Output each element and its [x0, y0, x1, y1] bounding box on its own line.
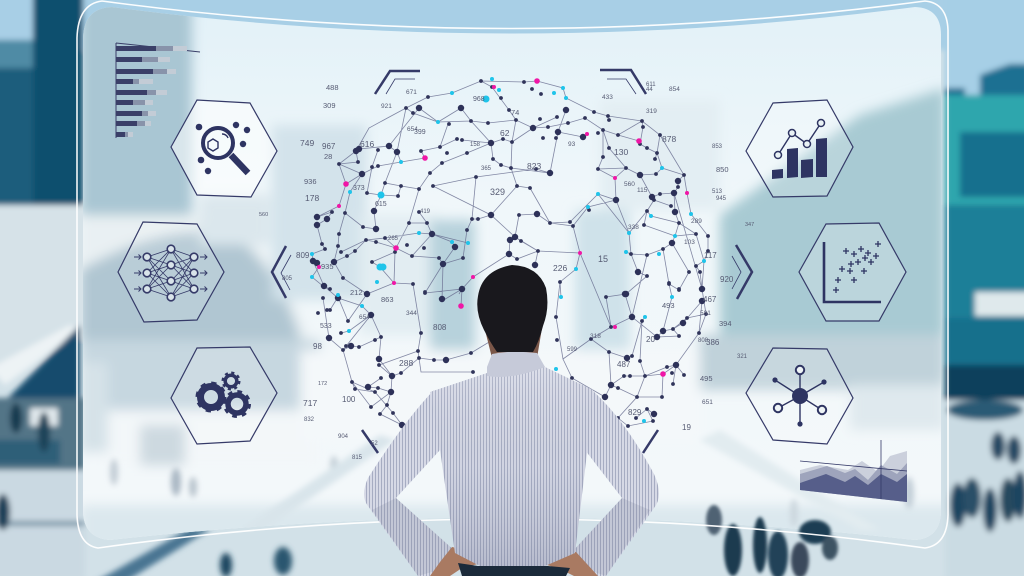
- floating data numbers: 433: [602, 94, 613, 101]
- hair: [477, 265, 547, 352]
- floating data numbers: 671: [406, 89, 417, 96]
- floating data numbers: 936: [304, 177, 317, 186]
- floating data numbers: 318: [590, 333, 601, 340]
- large cyan nodes: [380, 99, 486, 267]
- floating data numbers: 488: [326, 83, 339, 92]
- floating data numbers: 616: [360, 139, 374, 149]
- floating data numbers: 832: [304, 417, 315, 423]
- floating data numbers: 158: [470, 142, 481, 148]
- floating data numbers: 20: [646, 335, 655, 344]
- floating data numbers: 967: [322, 142, 336, 151]
- floating data numbers: 560: [624, 181, 635, 188]
- floating data numbers: 599: [567, 347, 578, 353]
- floating data numbers: 338: [628, 224, 639, 231]
- floating data numbers: 52: [371, 441, 378, 447]
- floating data numbers: 62: [500, 128, 510, 138]
- stacked area chart: [800, 440, 907, 502]
- floating data numbers: 850: [716, 165, 729, 174]
- floating data numbers: 513: [712, 189, 723, 195]
- floating data numbers: 651: [702, 399, 713, 406]
- floating data numbers: [259, 82, 754, 461]
- torso shirt: [430, 367, 593, 566]
- neck: [483, 322, 543, 358]
- large dark nodes: [313, 108, 702, 425]
- hexagon icon: magnifier over molecules: [171, 100, 277, 197]
- floating data numbers: 717: [303, 398, 317, 408]
- floating data numbers: 467: [703, 295, 717, 304]
- floating data numbers: 920: [720, 275, 734, 284]
- floating data numbers: 130: [614, 147, 628, 157]
- floating data numbers: 853: [712, 144, 723, 150]
- hexagon icon: gears: [171, 347, 277, 444]
- trousers: [458, 563, 570, 576]
- floating data numbers: 487: [617, 360, 631, 369]
- floating data numbers: 19: [682, 423, 691, 432]
- floating data numbers: 615: [375, 201, 387, 208]
- floating data numbers: 15: [598, 254, 608, 264]
- hexagon icon: scatter plot: [799, 223, 906, 321]
- horizontal bar chart: [116, 43, 200, 138]
- hands: [430, 547, 598, 576]
- right arm: [572, 390, 659, 576]
- floating data numbers: 103: [684, 239, 695, 246]
- floating data numbers: 309: [323, 101, 336, 110]
- floating data numbers: 495: [700, 374, 713, 383]
- floating data numbers: 117: [704, 251, 717, 260]
- floating data numbers: 347: [745, 222, 754, 228]
- floating data numbers: 289: [691, 218, 702, 225]
- floating data numbers: 74: [511, 108, 519, 117]
- floating data numbers: 373: [353, 185, 365, 192]
- floating data numbers: 805: [282, 276, 293, 282]
- floating data numbers: 829: [628, 408, 642, 417]
- hexagon icon: neural network: [118, 222, 224, 322]
- floating data numbers: 968: [473, 96, 485, 103]
- floating data numbers: 394: [719, 319, 732, 328]
- floating data numbers: 288: [399, 358, 413, 368]
- floating data numbers: 265: [388, 236, 399, 242]
- hexagon icon: hub and spokes: [746, 348, 853, 444]
- crowd at lower right: [706, 505, 838, 576]
- floating data numbers: 560: [259, 212, 268, 218]
- floating data numbers: 904: [338, 434, 349, 440]
- floating data numbers: 98: [313, 342, 322, 351]
- floating data numbers: 815: [352, 455, 363, 461]
- hexagon icon: bar and line chart: [746, 100, 853, 197]
- floating data numbers: 419: [420, 209, 431, 215]
- floating data numbers: 611: [646, 82, 656, 88]
- large magenta nodes: [346, 81, 663, 374]
- floating data numbers: 533: [320, 323, 332, 330]
- dark nodes: [318, 81, 708, 426]
- floating data numbers: 365: [481, 166, 492, 172]
- left arm: [364, 390, 456, 576]
- floating data numbers: 386: [706, 338, 720, 347]
- magenta nodes: [319, 87, 687, 327]
- floating data numbers: 823: [527, 161, 541, 171]
- floating data numbers: 321: [737, 354, 748, 360]
- floating data numbers: 226: [553, 263, 567, 273]
- floating data numbers: 809: [296, 251, 310, 260]
- right cuff and arm shading: [572, 498, 650, 576]
- glass panel interior: [83, 7, 941, 540]
- floating data numbers: 28: [324, 152, 332, 161]
- left cuff and arm shading: [372, 498, 456, 576]
- floating data numbers: 945: [716, 196, 727, 202]
- floating data numbers: 93: [568, 141, 576, 148]
- floating data numbers: 854: [669, 86, 680, 93]
- floating data numbers: 344: [406, 310, 417, 317]
- floating data numbers: 399: [414, 129, 426, 136]
- floating data numbers: 654: [407, 126, 418, 133]
- floating data numbers: 44: [646, 87, 653, 93]
- floating data numbers: 178: [305, 193, 319, 203]
- floating data numbers: 654: [359, 314, 370, 321]
- floating data numbers: 749: [300, 138, 314, 148]
- floating data numbers: 878: [662, 134, 676, 144]
- floating data numbers: 115: [637, 187, 648, 194]
- floating data numbers: 921: [381, 103, 392, 110]
- cyan nodes: [312, 79, 704, 421]
- floating data numbers: 808: [698, 338, 709, 344]
- network links: [312, 81, 708, 426]
- interface chevrons and brackets: [272, 70, 752, 472]
- floating data numbers: 172: [318, 381, 327, 387]
- floating data numbers: 212: [350, 288, 363, 297]
- floating data numbers: 863: [381, 295, 394, 304]
- man seen from behind: [364, 265, 659, 576]
- floating data numbers: 329: [490, 187, 505, 197]
- collar: [487, 352, 545, 377]
- floating data numbers: 808: [433, 323, 447, 332]
- floating data numbers: 319: [646, 108, 657, 115]
- floating data numbers: 493: [662, 301, 675, 310]
- floating data numbers: 935: [321, 262, 334, 271]
- floating data numbers: 581: [700, 310, 711, 317]
- shirt shading: [430, 367, 593, 566]
- data network sphere: [312, 79, 708, 426]
- floating data numbers: 100: [342, 395, 356, 404]
